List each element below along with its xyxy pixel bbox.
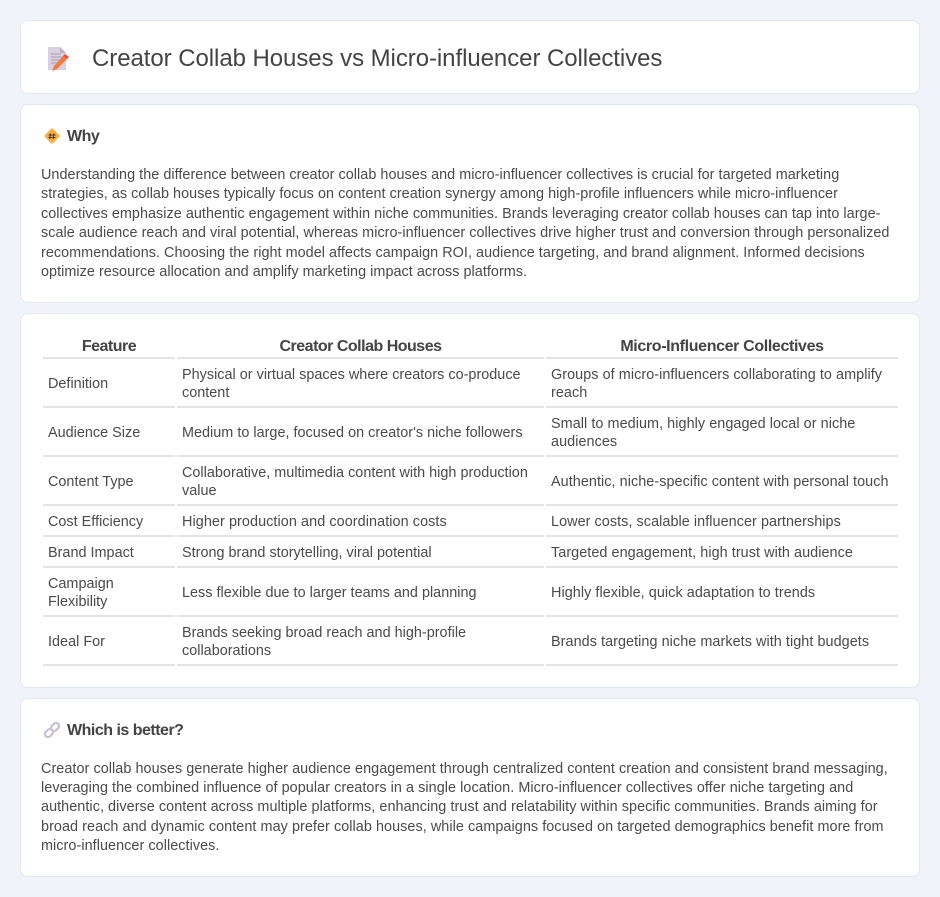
text: Campaign bbox=[48, 576, 114, 592]
text: Lower costs, scalable influencer partnerships bbox=[551, 514, 841, 530]
text: value bbox=[182, 483, 217, 499]
text block: why bbox=[41, 167, 889, 280]
text: Higher production and coordination costs bbox=[182, 514, 447, 530]
text: Groups of micro-influencers collaborating to amplify bbox=[551, 367, 882, 383]
icon: document with pencil bbox=[48, 47, 69, 71]
text: Highly flexible, quick adaptation to trends bbox=[551, 585, 815, 601]
icon: warning diamond bbox=[44, 128, 60, 144]
text: Collaborative, multimedia content with high production bbox=[182, 465, 528, 481]
panel: which is better bbox=[20, 698, 920, 877]
icon: link bbox=[44, 722, 60, 738]
table rows bbox=[43, 357, 898, 666]
panel: header bbox=[20, 20, 920, 94]
text: optimize resource allocation and amplify marketing impact across platforms. bbox=[41, 264, 527, 280]
text: scale audience reach and viral potential, whereas micro-influencer collectives drive higher trust and conversion through personalized bbox=[41, 225, 889, 241]
text: Definition bbox=[48, 376, 108, 392]
text: Brands seeking broad reach and high-profile bbox=[182, 625, 466, 641]
text: authentic, diverse content across multiple platforms, enhancing trust and relatability within specific communities. Brands aiming for bbox=[41, 799, 878, 815]
text: Cost Efficiency bbox=[48, 514, 143, 530]
text: Flexibility bbox=[48, 594, 107, 610]
text: Targeted engagement, high trust with audience bbox=[551, 545, 853, 561]
text: Content Type bbox=[48, 474, 134, 490]
panel: why bbox=[20, 104, 920, 303]
text: Audience Size bbox=[48, 425, 140, 441]
text: Strong brand storytelling, viral potential bbox=[182, 545, 432, 561]
heading: which is better: Which is better? bbox=[67, 722, 183, 739]
text: collectives emphasize authentic engagement within niche communities. Brands leveraging creator collab houses can tap into large- bbox=[41, 206, 880, 222]
text: Physical or virtual spaces where creators co-produce bbox=[182, 367, 521, 383]
text: Small to medium, highly engaged local or niche bbox=[551, 416, 855, 432]
text: broad reach and dynamic content may prefer collab houses, while campaigns focused on targeted demographics benefit more from bbox=[41, 819, 884, 835]
text: Medium to large, focused on creator's niche followers bbox=[182, 425, 523, 441]
text: Feature bbox=[82, 338, 136, 355]
text: micro-influencer collectives. bbox=[41, 838, 219, 854]
text block: which is better bbox=[41, 761, 888, 854]
text: Brand Impact bbox=[48, 545, 134, 561]
text: Creator collab houses generate higher audience engagement through centralized content creation and consistent brand messaging, bbox=[41, 761, 888, 777]
heading: why: Why bbox=[67, 128, 99, 145]
text: Micro-Influencer Collectives bbox=[620, 338, 824, 355]
text: strategies, as collab houses typically focus on content creation synergy among high-profile influencers while micro-influencer bbox=[41, 186, 838, 202]
text: Ideal For bbox=[48, 634, 105, 650]
text: Authentic, niche-specific content with personal touch bbox=[551, 474, 889, 490]
panel: comparison table bbox=[20, 313, 920, 688]
table header bbox=[82, 338, 824, 355]
text: content bbox=[182, 385, 229, 401]
text: Less flexible due to larger teams and planning bbox=[182, 585, 477, 601]
text: Understanding the difference between creator collab houses and micro-influencer collectives is crucial for targeted marketing bbox=[41, 167, 839, 183]
text: leveraging the combined influence of popular creators in a single location. Micro-influencer collectives offer niche targeting and bbox=[41, 780, 853, 796]
text: Brands targeting niche markets with tight budgets bbox=[551, 634, 869, 650]
text: Creator Collab Houses bbox=[280, 338, 441, 355]
text: recommendations. Choosing the right model affects campaign ROI, audience targeting, and brand alignment. Informed decisions bbox=[41, 245, 865, 261]
text: reach bbox=[551, 385, 587, 401]
title: Creator Collab Houses vs Micro-influencer Collectives bbox=[92, 45, 662, 72]
text: audiences bbox=[551, 434, 617, 450]
text: collaborations bbox=[182, 643, 271, 659]
